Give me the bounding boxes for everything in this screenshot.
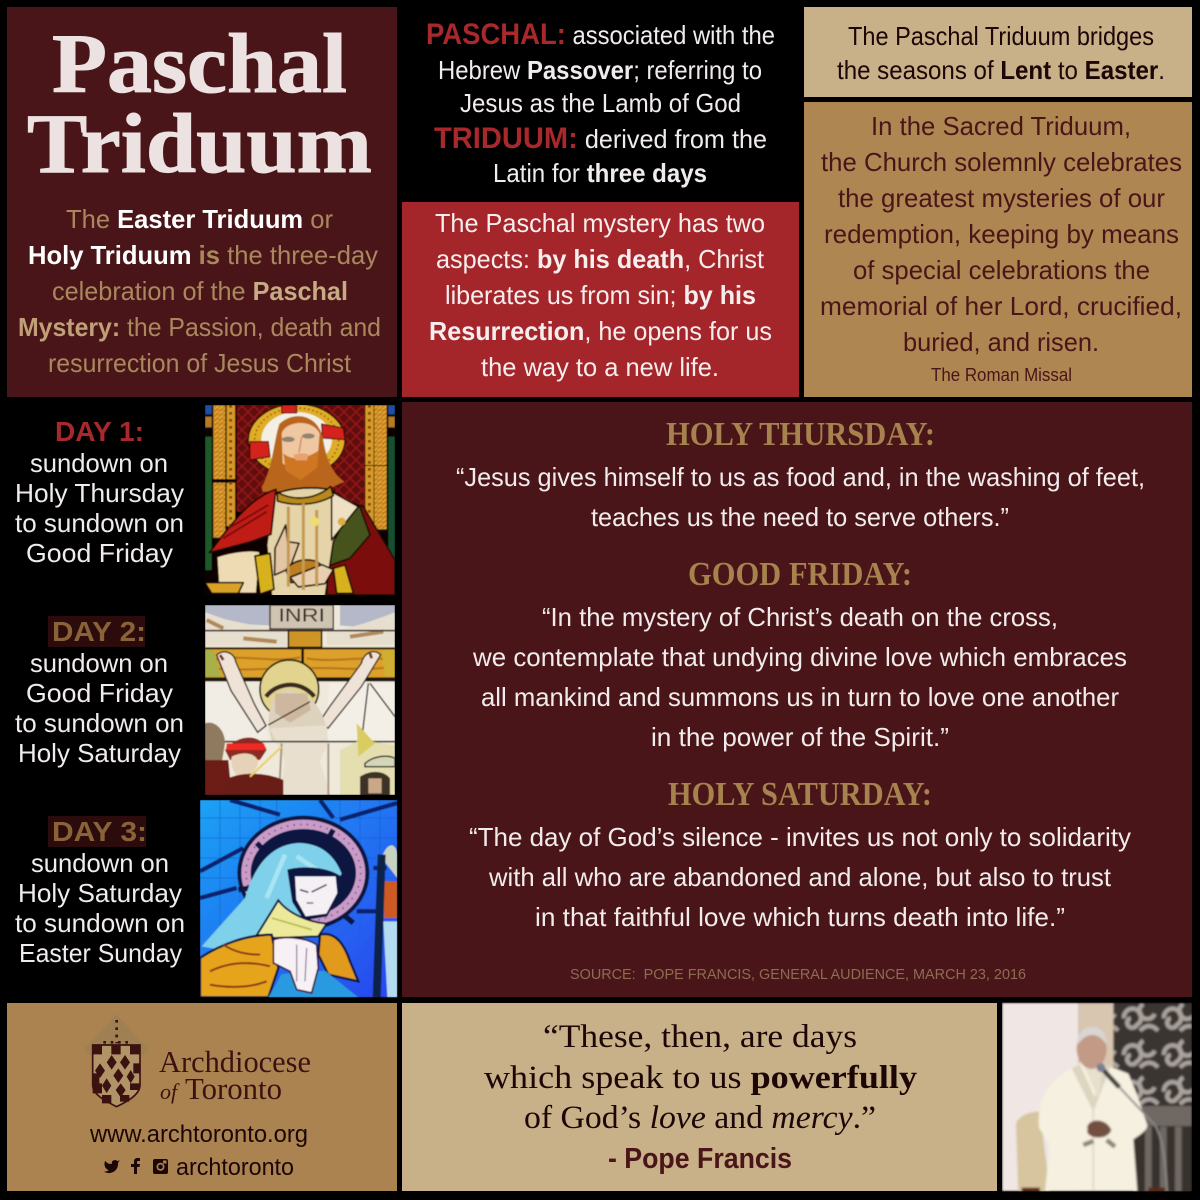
day 1 label: to sundown on (15, 508, 184, 538)
text block: Paschal and Triduum word meanings: TRIDUUM: derived from the (434, 122, 767, 155)
Holy Saturday reflection (469, 776, 1131, 932)
panel: Roman Missal quotation (804, 102, 1192, 397)
Good Friday reflection: we contemplate that undying divine love which embraces (472, 642, 1127, 672)
image: stained glass of the crucifixion: INRI (278, 604, 325, 625)
panel: Paschal mystery aspects: the way to a new life. (481, 352, 719, 382)
text block: definition of the Easter Triduum: Holy Triduum is the three-day (28, 240, 378, 270)
day 1 label: DAY 1: (55, 416, 144, 447)
day 1 label: Good Friday (26, 538, 173, 568)
text block: definition of the Easter Triduum: Mystery: the Passion, death and (18, 312, 381, 342)
icon: facebook (131, 1158, 140, 1174)
panel: Paschal mystery aspects: aspects: by his death, Christ (436, 244, 765, 274)
Good Friday reflection (472, 556, 1127, 752)
day 3 label: Easter Sunday (19, 938, 182, 968)
day 3 label: to sundown on (15, 908, 185, 938)
social media handles (104, 1154, 294, 1181)
image: stained glass of Jesus at the Last Supper (205, 404, 395, 598)
panel: bridge between Lent and Easter: the seasons of Lent to Easter. (837, 55, 1165, 85)
panel: bridge between Lent and Easter (804, 7, 1192, 97)
panel: Pope Francis quotation (402, 1003, 997, 1191)
day 3 label: Holy Saturday (18, 878, 182, 908)
website address: www.archtoronto.org (89, 1121, 308, 1148)
panel: Paschal mystery aspects (402, 202, 799, 397)
text block: definition of the Easter Triduum (18, 204, 381, 378)
title (27, 17, 372, 191)
panel: Roman Missal quotation: redemption, keeping by means (824, 219, 1179, 249)
Holy Saturday reflection: with all who are abandoned and alone, but also to trust (488, 862, 1112, 892)
panel: Paschal mystery aspects: The Paschal mystery has two (435, 208, 765, 238)
text block: Paschal and Triduum word meanings (426, 18, 775, 188)
panel: Paschal mystery aspects: Resurrection, he opens for us (429, 316, 772, 346)
day 1 label (15, 416, 184, 568)
panel: bridge between Lent and Easter: The Paschal Triduum bridges (848, 21, 1154, 51)
panel: Roman Missal quotation: In the Sacred Triduum, (871, 111, 1131, 141)
Good Friday reflection: in the power of the Spirit.” (651, 722, 949, 752)
panel: Roman Missal quotation: memorial of her Lord, crucified, (820, 291, 1182, 321)
Good Friday reflection: GOOD FRIDAY: (688, 556, 912, 593)
Good Friday reflection: “In the mystery of Christ’s death on the cross, (542, 602, 1058, 632)
panel: Pope Francis reflections on the three days (402, 402, 1192, 997)
Holy Thursday reflection (456, 416, 1145, 532)
day 2 label: to sundown on (15, 708, 184, 738)
panel: Roman Missal quotation: The Roman Missal (931, 365, 1072, 385)
Holy Thursday reflection: “Jesus gives himself to us as food and, in the washing of feet, (456, 462, 1145, 492)
text block: definition of the Easter Triduum: resurrection of Jesus Christ (48, 348, 352, 378)
panel: Roman Missal quotation: the greatest mysteries of our (838, 183, 1165, 213)
Holy Saturday reflection: in that faithful love which turns death into life.” (535, 902, 1065, 932)
image: stained glass of the crucifixion (205, 604, 395, 795)
panel: Archdiocese of Toronto contact (7, 1003, 397, 1191)
panel: Roman Missal quotation: of special celebrations the (853, 255, 1150, 285)
day 3 label: DAY 3: (52, 816, 147, 847)
panel: Paschal mystery aspects: liberates us from sin; by his (445, 280, 756, 310)
text block: Paschal and Triduum word meanings: Hebrew Passover; referring to (438, 55, 762, 85)
text block: definition of the Easter Triduum: The Easter Triduum or (66, 204, 333, 234)
text block: definition of the Easter Triduum: celebration of the Paschal (52, 276, 348, 306)
day 1 label: Holy Thursday (15, 478, 184, 508)
Archdiocese of Toronto wordmark (159, 1044, 311, 1106)
title: Paschal (52, 17, 347, 111)
image: photo of Pope Francis at a microphone (1002, 1003, 1192, 1193)
day 2 label: Good Friday (26, 678, 173, 708)
day 2 label (15, 616, 184, 768)
image: stained glass of Mary praying (200, 800, 397, 997)
text block: Paschal and Triduum word meanings: Jesus as the Lamb of God (460, 88, 741, 118)
day 3 label (15, 816, 185, 968)
day 1 label: sundown on (30, 448, 168, 478)
Archdiocese of Toronto wordmark: of (160, 1079, 180, 1104)
panel: Pope Francis quotation: - Pope Francis (608, 1143, 792, 1175)
panel: Roman Missal quotation: the Church solemnly celebrates (821, 147, 1182, 177)
Good Friday reflection: all mankind and summons us in turn to love one another (481, 682, 1119, 712)
panel: Pope Francis quotation: of God’s love and mercy.” (524, 1100, 876, 1136)
social handle: archtoronto (176, 1154, 294, 1181)
icon: twitter (104, 1160, 120, 1173)
day 2 label: sundown on (30, 648, 168, 678)
Holy Thursday reflection: teaches us the need to serve others.” (591, 502, 1009, 532)
Archdiocese of Toronto wordmark: Toronto (185, 1071, 282, 1106)
icon: archdiocese coat of arms (83, 1014, 149, 1107)
text block: Paschal and Triduum word meanings: Latin for three days (493, 158, 707, 188)
day 2 label: Holy Saturday (18, 738, 181, 768)
Holy Saturday reflection: HOLY SATURDAY: (668, 776, 932, 813)
panel: Pope Francis quotation: which speak to us powerfully (484, 1060, 918, 1096)
panel: Roman Missal quotation: buried, and risen. (903, 327, 1099, 357)
day 2 label: DAY 2: (52, 616, 146, 647)
icon: instagram (153, 1159, 168, 1174)
panel: Pope Francis quotation: “These, then, are days (543, 1019, 857, 1055)
source credit: SOURCE: POPE FRANCIS, GENERAL AUDIENCE, MARCH 23, 2016 (570, 966, 1026, 983)
day 3 label: sundown on (31, 848, 169, 878)
panel: title and definition (7, 7, 397, 397)
Holy Saturday reflection: “The day of God’s silence - invites us not only to solidarity (469, 822, 1131, 852)
Archdiocese of Toronto wordmark: Archdiocese (159, 1044, 311, 1079)
title: Triduum (27, 97, 372, 191)
text block: Paschal and Triduum word meanings: PASCHAL: associated with the (426, 18, 775, 51)
Holy Thursday reflection: HOLY THURSDAY: (666, 416, 935, 453)
